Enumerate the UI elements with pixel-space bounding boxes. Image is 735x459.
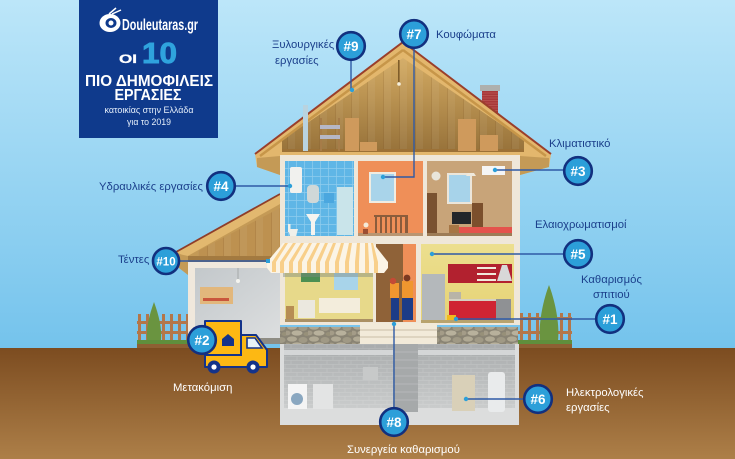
- main house roof and attic: [255, 42, 551, 175]
- heading: 10: [142, 38, 177, 70]
- heading: [85, 38, 213, 104]
- left fence and tree: [137, 302, 191, 348]
- label: window frames: Κουφώματα: [436, 29, 496, 41]
- awning: [267, 243, 388, 277]
- badge #10: [153, 248, 179, 274]
- label: painting: Ελαιοχρωματισμοί: [535, 219, 627, 231]
- badge #5: #5: [570, 247, 586, 262]
- badge #8: [380, 408, 408, 436]
- label: electrical: εργασίες: [566, 402, 610, 414]
- badge #3: [564, 157, 592, 185]
- living room: [285, 265, 373, 322]
- outside steps: [360, 323, 437, 344]
- badge #1: #1: [602, 312, 618, 327]
- couple of workers: [390, 275, 413, 320]
- label: carpentry: Ξυλουργικές: [272, 39, 334, 51]
- badge #9: #9: [343, 39, 359, 54]
- connector lines and markers: [166, 40, 610, 420]
- badge #8: #8: [386, 415, 402, 430]
- subheading: για το 2019: [127, 117, 171, 128]
- badge #10: #10: [156, 256, 176, 268]
- title panel: [79, 0, 218, 138]
- sky background: [0, 0, 735, 349]
- ground: [0, 348, 735, 459]
- badge #6: [524, 385, 552, 413]
- label: moving: Μετακόμιση: [173, 382, 232, 394]
- badge #6: #6: [530, 392, 546, 407]
- badge #4: #4: [213, 179, 229, 194]
- right fence and tree: [518, 285, 572, 348]
- label: house cleaning: σπιτιού: [593, 289, 630, 301]
- truck: [205, 321, 267, 374]
- subheading: κατοικίας στην Ελλάδα: [104, 105, 194, 116]
- badge #2: [188, 326, 216, 354]
- badge #3: #3: [570, 164, 586, 179]
- heading: ΠΙΟ ΔΗΜΟΦΙΛΕΙΣ: [85, 73, 213, 90]
- label: plumbing: Υδραυλικές εργασίες: [99, 181, 204, 193]
- badge #7: #7: [406, 27, 422, 42]
- orange hall room: [358, 161, 423, 236]
- label: air conditioning: Κλιματιστικό: [549, 138, 610, 150]
- badge #2: #2: [194, 333, 210, 348]
- badge #1: [596, 305, 624, 333]
- kitchen: [421, 244, 514, 323]
- basement: [280, 344, 519, 425]
- badge #5: [564, 240, 592, 268]
- label: electrical: Ηλεκτρολογικές: [566, 387, 644, 399]
- subheading: [104, 105, 194, 128]
- badge #7: [400, 20, 428, 48]
- label: cleaning crew: Συνεργεία καθαρισμού: [347, 444, 460, 456]
- chimney: [480, 85, 500, 120]
- house body: [280, 155, 520, 325]
- heading: ΕΡΓΑΣΙΕΣ: [114, 87, 182, 104]
- attic storage: [303, 60, 498, 151]
- bathroom: [285, 161, 354, 236]
- logo: Douleutaras.gr: [122, 17, 198, 34]
- bedroom: [427, 161, 512, 236]
- staircase hall: [376, 244, 416, 322]
- heading: ΟΙ: [119, 52, 137, 66]
- label: carpentry: εργασίες: [275, 55, 319, 67]
- badge #9: [337, 32, 365, 60]
- label: awnings: Τέντες: [118, 254, 150, 266]
- badge #4: [207, 172, 235, 200]
- garage: [170, 194, 280, 344]
- foundation stone: [280, 327, 518, 344]
- label: house cleaning: Καθαρισμός: [581, 274, 642, 286]
